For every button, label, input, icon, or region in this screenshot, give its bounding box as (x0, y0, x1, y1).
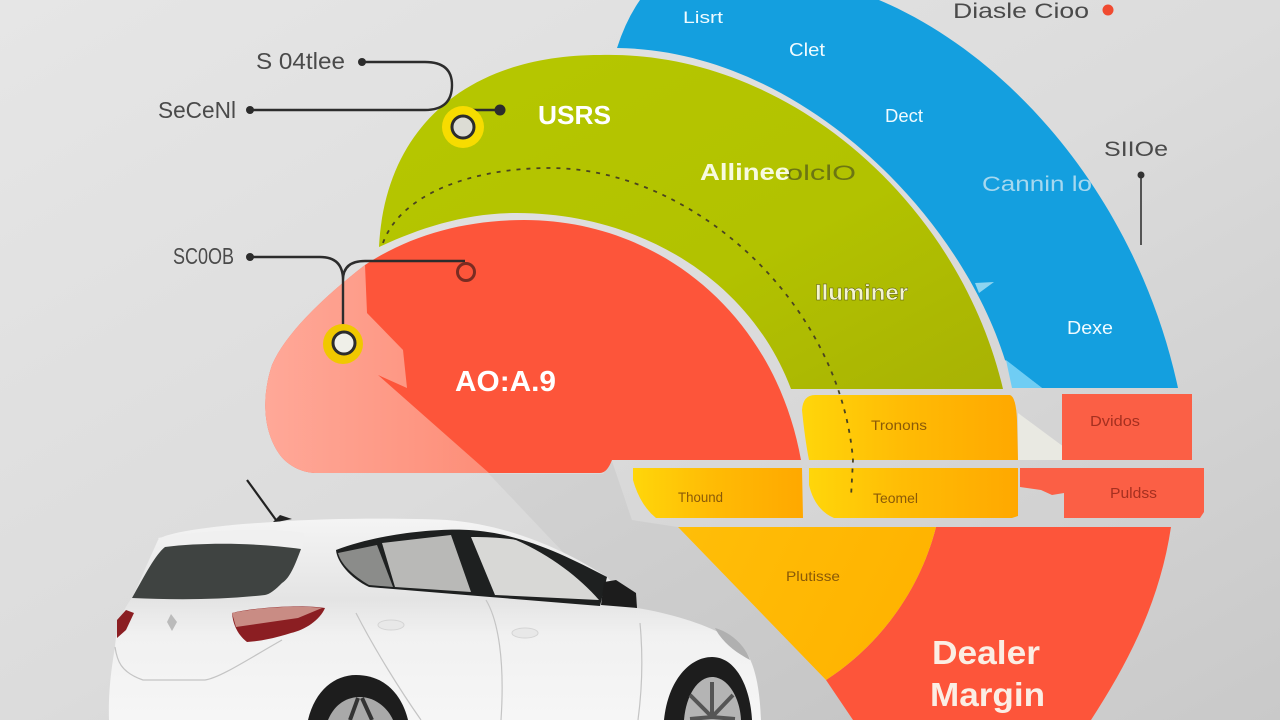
quarter window (338, 545, 393, 587)
callouts (158, 48, 506, 364)
panel: bars row 2 (633, 468, 1204, 518)
bar: Tronons: Tronons (871, 417, 927, 433)
dotted path (383, 168, 853, 497)
callout: second label: SeCeNl (158, 97, 236, 123)
callout: right label (1104, 138, 1168, 245)
marker: yellow ring lower (323, 324, 363, 364)
label: Iluminer: Iluminer (815, 280, 908, 305)
segment: Plutisse (678, 527, 936, 680)
segment: Dealer Margin: Dealer (932, 634, 1040, 671)
label: AO:A.9: AO:A.9 (455, 366, 556, 398)
car (109, 480, 761, 720)
panel: blue arc (617, 0, 1178, 388)
callout: third label: SC0OB (173, 243, 234, 269)
segment: Plutisse: Plutisse (786, 568, 840, 584)
bar: Thound: Thound (678, 489, 723, 505)
marker: small ring (458, 264, 474, 280)
bar: Thound (633, 468, 803, 518)
panel: bars row 1 (802, 394, 1192, 460)
segment: Dealer Margin: Margin (930, 676, 1045, 713)
label: olclO: olclO (786, 162, 856, 185)
segment: Dealer Margin (826, 527, 1171, 720)
lighter wedge (265, 265, 489, 473)
roof spoiler (158, 530, 304, 550)
side window frame (336, 530, 607, 606)
panel: red arc (265, 220, 801, 473)
door handles (378, 620, 538, 638)
label: blue 4: Cannin lo (982, 173, 1092, 196)
panel: bottom segments (678, 527, 1171, 720)
bar: Teomel (809, 468, 1018, 518)
bar: Puldss (1020, 468, 1204, 518)
rear window (132, 544, 301, 599)
antenna (247, 480, 276, 520)
rear wheel (308, 675, 408, 720)
panel: green arc (379, 55, 1003, 389)
bar: Dividos (1062, 394, 1192, 460)
car body (109, 519, 761, 720)
badge (167, 614, 177, 631)
door lines (356, 600, 642, 720)
label: blue 3: Dect (885, 106, 923, 126)
label: blue 1: Lisrt (683, 8, 723, 27)
label: blue 5: Dexe (1067, 318, 1113, 338)
decorative diagonal shade (489, 461, 853, 720)
front window (471, 537, 599, 600)
bar: Tronons (802, 395, 1018, 460)
bar: Puldss: Puldss (1110, 485, 1157, 502)
label: USRS: USRS (538, 100, 611, 130)
taillight right (232, 606, 325, 642)
callout: top label: S 04tlee (256, 48, 345, 74)
bar: Dividos: Dvidos (1090, 413, 1140, 430)
label: Allinee: Allinee (700, 159, 790, 185)
bar: Teomel: Teomel (873, 490, 918, 506)
marker: top right dot (1102, 4, 1114, 16)
label: blue 2: Clet (789, 40, 825, 60)
decorative light wedge (1018, 413, 1064, 460)
front wheel (664, 657, 752, 720)
top right label: Diasle Cioo (953, 0, 1089, 23)
taillight left (117, 610, 134, 638)
headlight (715, 628, 750, 660)
mirror (601, 580, 637, 608)
connector lines (250, 62, 500, 335)
middle window (382, 535, 471, 592)
marker: yellow ring top (442, 106, 484, 148)
callout: right label: SIIOe (1104, 138, 1168, 161)
tailgate line (115, 640, 282, 680)
